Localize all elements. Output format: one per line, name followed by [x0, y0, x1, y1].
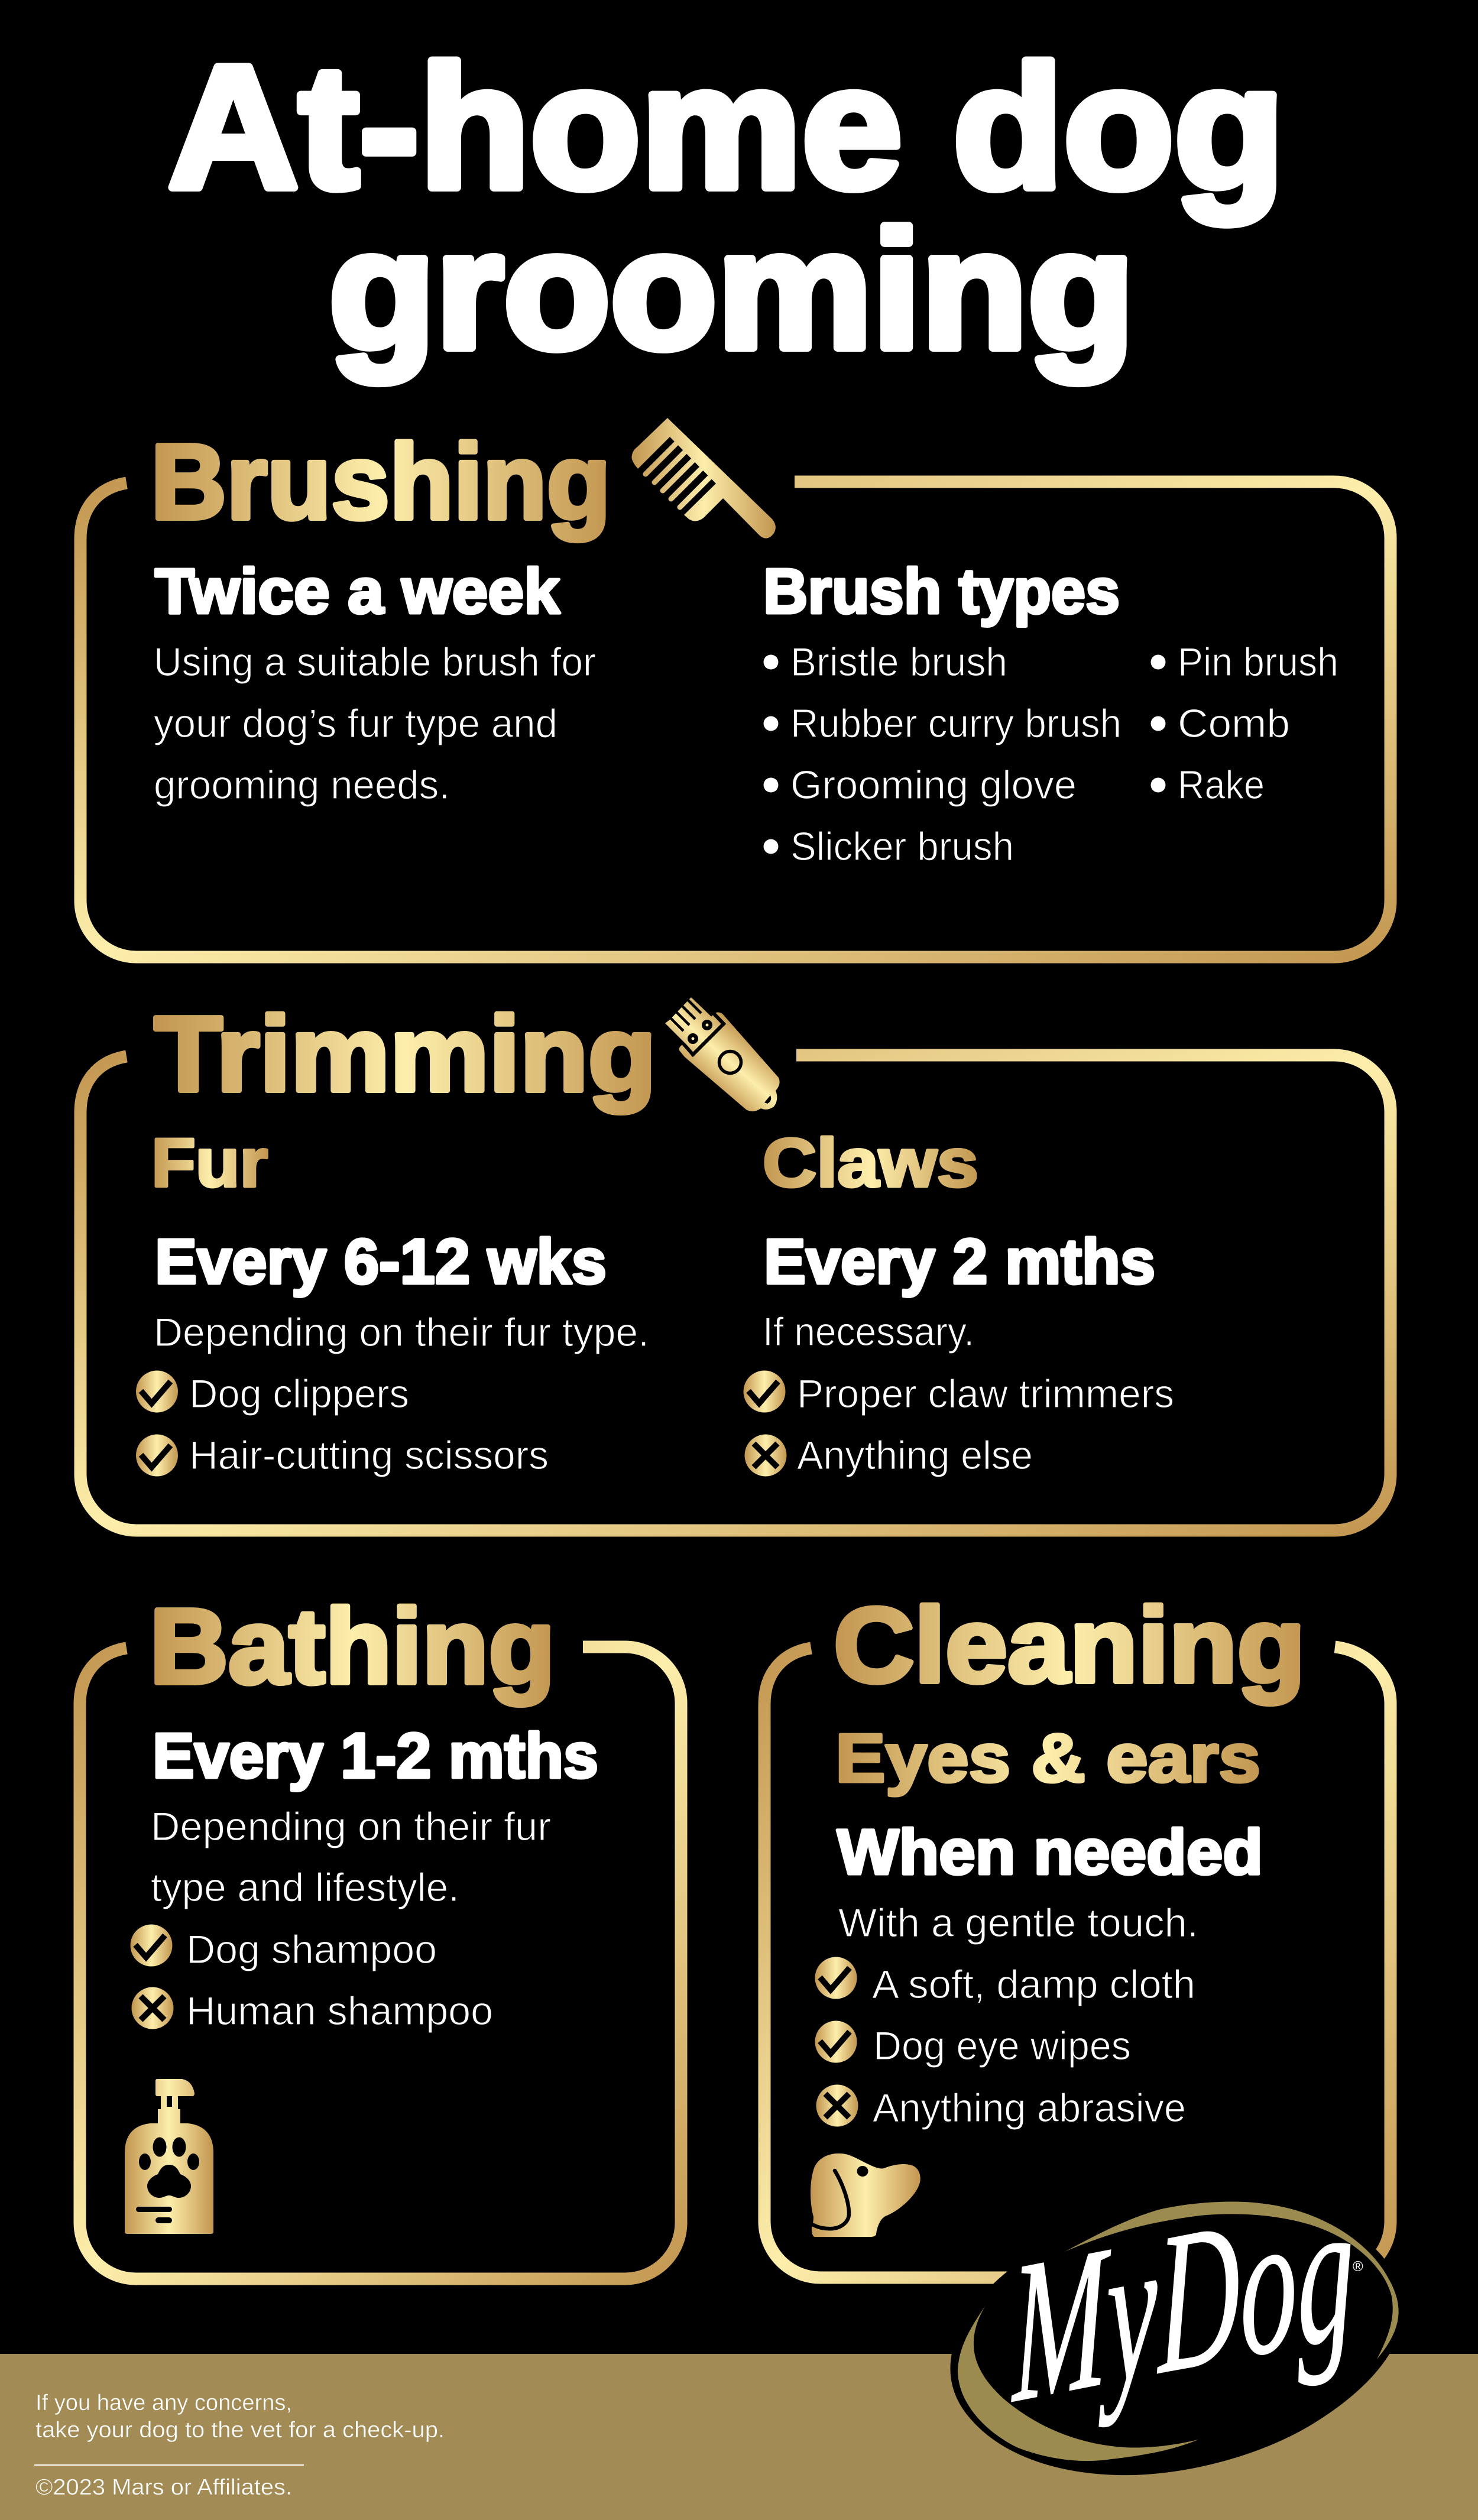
- item: human shampoo: Human shampoo: [186, 1989, 493, 2033]
- icon: shampoo bottle: [125, 2079, 213, 2234]
- panel: cleaning: [764, 1586, 1391, 2278]
- title: [168, 29, 1285, 384]
- item: dog clippers: Dog clippers: [189, 1371, 409, 1416]
- heading: Brushing: Brushing: [151, 423, 611, 541]
- icon: cross: [816, 2084, 858, 2127]
- footer text: If you have any concerns,: [35, 2391, 292, 2415]
- icon: cross: [745, 1434, 786, 1477]
- footer band: [0, 2354, 1478, 2520]
- subheading: Brush types: Brush types: [763, 555, 1120, 627]
- subheading: Twice a week: Twice a week: [155, 555, 560, 627]
- icon: comb: [631, 418, 776, 539]
- footer text: [34, 2391, 445, 2500]
- frequency: every 1-2 months: Every 1-2 mths: [153, 1720, 598, 1791]
- column: fur: [136, 1124, 649, 1478]
- title: At-home dog: [168, 29, 1285, 226]
- frequency: when needed: When needed: [837, 1816, 1263, 1887]
- heading: Claws: Claws: [763, 1124, 978, 1201]
- panel: brushing: [80, 418, 1391, 957]
- heading: Trimming: Trimming: [154, 995, 656, 1114]
- list: brush types: Bristle brush: [790, 640, 1007, 685]
- icon: clippers: [665, 997, 780, 1111]
- icon: check: [136, 1370, 178, 1413]
- list: brush types: Slicker brush: [790, 824, 1014, 869]
- heading: Fur: Fur: [151, 1124, 268, 1201]
- item: anything else: Anything else: [797, 1433, 1033, 1478]
- title: grooming: [329, 196, 1135, 384]
- icon: check: [130, 1925, 173, 1966]
- panel: trimming: [80, 995, 1391, 1530]
- text: bathing note: [151, 1804, 551, 1910]
- logo: MyDog: [950, 2156, 1402, 2475]
- heading: Bathing: Bathing: [150, 1587, 555, 1706]
- panel: bathing: [80, 1587, 681, 2279]
- heading: Cleaning: Cleaning: [834, 1586, 1305, 1705]
- cleaning frame: [764, 1647, 1391, 2278]
- item: dog shampoo: Dog shampoo: [186, 1927, 437, 1972]
- text: brushing description: your dog’s fur type and: [154, 701, 558, 746]
- list: brush types: Comb: [1178, 701, 1290, 746]
- note: fur type: Depending on their fur type.: [154, 1310, 649, 1355]
- item: proper claw trimmers: Proper claw trimmers: [797, 1371, 1174, 1416]
- list: brush types: Grooming glove: [790, 763, 1077, 807]
- item: hair-cutting scissors: Hair-cutting scissors: [189, 1433, 549, 1478]
- frequency: every 6-12 weeks: Every 6-12 wks: [155, 1225, 607, 1297]
- icon: check: [815, 2020, 857, 2063]
- list: brush types: Pin brush: [1178, 640, 1338, 685]
- text: brushing description: Using a suitable brush for: [154, 640, 596, 685]
- list: brush types: Rubber curry brush: [790, 701, 1122, 746]
- icon: check: [815, 1957, 857, 1999]
- footer text: take your dog to the vet for a check-up.: [35, 2418, 445, 2443]
- list: brush types: [764, 640, 1338, 869]
- icon: dog head: [811, 2153, 920, 2237]
- trimming frame: [80, 1055, 1391, 1530]
- item: dog eye wipes: Dog eye wipes: [873, 2023, 1131, 2068]
- text: bathing note: type and lifestyle.: [151, 1865, 459, 1910]
- frequency: every 2 months: Every 2 mths: [764, 1225, 1155, 1297]
- text: brushing description: [154, 640, 596, 807]
- registered mark: ®: [1353, 2259, 1363, 2275]
- list: brush types: Rake: [1178, 763, 1265, 807]
- icon: check: [744, 1370, 785, 1413]
- column: claws: [744, 1124, 1174, 1478]
- icon: cross: [131, 1987, 174, 2029]
- icon: check: [136, 1434, 178, 1477]
- bathing frame: [80, 1647, 681, 2279]
- text: brushing description: grooming needs.: [154, 763, 450, 807]
- item: soft damp cloth: A soft, damp cloth: [872, 1962, 1195, 2007]
- text: bathing note: Depending on their fur: [151, 1804, 551, 1849]
- note: if necessary: If necessary.: [763, 1309, 974, 1354]
- subheading: Eyes and ears: Eyes & ears: [835, 1720, 1260, 1796]
- item: anything abrasive: Anything abrasive: [873, 2086, 1186, 2130]
- footer text: ©2023 Mars or Affiliates.: [35, 2475, 292, 2500]
- brushing frame: [80, 482, 1391, 957]
- note: gentle touch: With a gentle touch.: [838, 1900, 1198, 1945]
